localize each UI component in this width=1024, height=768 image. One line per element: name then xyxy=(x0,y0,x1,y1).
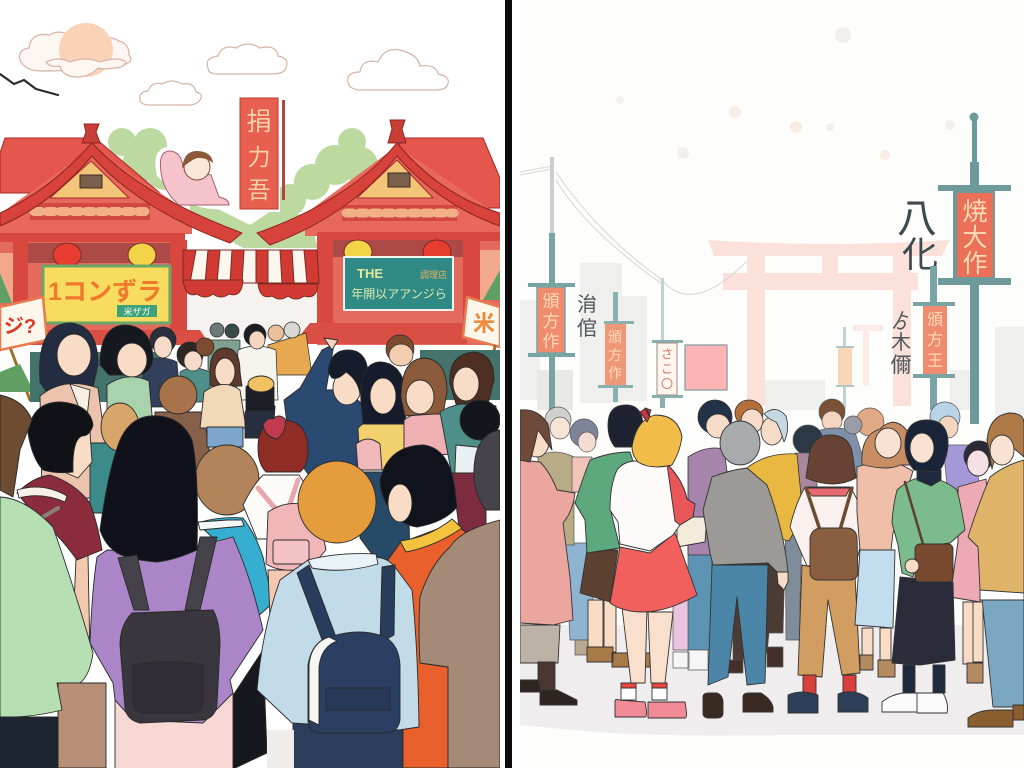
sun xyxy=(59,23,113,77)
small dark characters: ゟ xyxy=(891,310,911,333)
bird branch line xyxy=(0,74,58,95)
yellow shop sign: 1コンずラ xyxy=(48,278,162,306)
crowd person: dark outfit with yellow cap xyxy=(245,376,275,438)
yellow shop sign: 米ザガ xyxy=(123,306,151,317)
crowd person: woman in yellow top xyxy=(356,362,410,568)
cloud under the sun xyxy=(46,59,126,77)
cloud lower middle xyxy=(140,81,201,105)
crowd person: woman with black bob left xyxy=(40,323,106,498)
person: pink sweater girl xyxy=(855,422,914,677)
beam and pillars xyxy=(317,232,500,241)
pink reclining mascot xyxy=(155,147,232,209)
ground xyxy=(520,625,1024,736)
banner pole third: こ xyxy=(661,362,673,376)
green bushes xyxy=(108,128,378,248)
crowd person: black hair orange coat xyxy=(380,445,467,768)
banner pole far xyxy=(836,327,854,409)
banner pole right middle: 頒 xyxy=(927,311,943,329)
banner pole left: 頒 xyxy=(542,292,560,311)
banner pole left: 方 xyxy=(542,312,560,331)
crowd person: right front dark hair xyxy=(452,400,500,535)
person: right pink dress dark hair xyxy=(950,441,994,683)
roof finial xyxy=(388,120,406,143)
frieze xyxy=(30,203,150,220)
pink sign xyxy=(685,345,727,390)
teal wall behind crowd xyxy=(30,350,500,402)
person: green jacket dark hair xyxy=(575,405,650,667)
crowd person: tan pants and arm xyxy=(58,555,106,768)
person: yellow hair girl in red skirt xyxy=(610,408,707,718)
person: purple sweater xyxy=(688,400,732,555)
cloud right xyxy=(348,50,448,90)
banner pole tall: 焼 xyxy=(962,198,988,226)
white placard left xyxy=(0,297,47,400)
crowd person: pink backpack with polka bow xyxy=(243,416,326,625)
frieze xyxy=(342,205,457,221)
small dark characters xyxy=(890,310,912,377)
beam and pillars xyxy=(0,233,185,242)
banner pole left xyxy=(528,157,575,410)
gable xyxy=(50,161,129,198)
left temple building xyxy=(0,124,242,345)
striped awning xyxy=(183,250,319,299)
front gable panel xyxy=(6,157,192,234)
crowd person: orange hair navy backpack xyxy=(257,461,419,768)
cloud upper middle xyxy=(207,44,287,74)
soft floating dots xyxy=(616,27,955,160)
teal shop sign xyxy=(344,257,453,310)
crowd person: navy jacket man xyxy=(284,338,368,474)
person: right yellow jacket with jeans xyxy=(968,413,1024,727)
banner pole second: 作 xyxy=(608,365,622,381)
sky xyxy=(0,0,500,400)
white placard right xyxy=(462,296,500,350)
person: green sweater girl with shoulder bag xyxy=(882,420,965,713)
teal shop sign: 調理店 xyxy=(420,270,447,280)
banner pole second xyxy=(598,292,634,402)
right temple building xyxy=(257,120,500,345)
faded city buildings xyxy=(520,263,1024,417)
store opening xyxy=(188,283,317,338)
crowd person: grey-brown hair xyxy=(474,430,500,510)
small text beside left pole: 倌 xyxy=(577,317,597,340)
large dark characters: 八 xyxy=(897,197,937,241)
banner pole tall: 大 xyxy=(962,224,988,252)
person: grey jacket back view xyxy=(703,421,788,718)
teal shop sign: THE xyxy=(357,266,383,281)
flat upper roof xyxy=(0,138,160,193)
crowd person: woman with glasses in pink xyxy=(401,358,450,458)
teal shop sign: 年開以アアンジら xyxy=(351,287,447,301)
banner pole third xyxy=(652,278,683,408)
banner pole tall: 作 xyxy=(962,250,988,278)
left shop canopy xyxy=(30,330,210,345)
faded torii gate xyxy=(708,240,950,406)
red hanging banner: 吾 xyxy=(248,177,270,203)
banner pole second: 頒 xyxy=(608,329,622,345)
crowd person: woman with cream sweater xyxy=(200,348,246,447)
utility wires xyxy=(520,166,746,294)
crowd person: right woman with brown hair xyxy=(440,352,496,476)
red hanging banner: 力 xyxy=(248,144,270,170)
ground gap shade xyxy=(267,730,294,768)
hanging lanterns xyxy=(53,240,451,267)
person: pink coat woman xyxy=(520,410,577,705)
crowd person: black hair maroon shirt xyxy=(17,402,102,560)
banner pole right middle: 方 xyxy=(927,331,943,349)
person: white hair man in yellow sweater xyxy=(747,409,803,541)
front gable panel xyxy=(305,152,490,236)
banner pole left: 作 xyxy=(542,332,560,351)
banner pole third: 〇 xyxy=(661,377,673,391)
small dark characters: 儞 xyxy=(890,354,912,377)
large dark characters: 化 xyxy=(902,234,938,275)
banner pole right middle: 王 xyxy=(927,353,943,370)
far background crowd xyxy=(143,322,414,407)
divider bar xyxy=(505,0,512,768)
white placard right: 米 xyxy=(473,311,495,336)
small text beside left pole: 㳙 xyxy=(577,293,597,316)
large dark characters xyxy=(897,197,938,275)
wall xyxy=(317,241,500,345)
roof finial xyxy=(82,124,100,143)
crowd person: green top with round hat xyxy=(90,325,157,513)
panel: festival scene xyxy=(0,0,500,768)
crowd person: back view brown short hair xyxy=(153,376,213,472)
wall xyxy=(0,242,170,345)
right shop canopy xyxy=(293,323,467,344)
person: brown hair girl with backpack xyxy=(788,435,868,713)
gable xyxy=(357,160,433,198)
crowd person: tan coat xyxy=(419,520,500,768)
background crowd row xyxy=(538,399,981,673)
panel: street scene xyxy=(520,0,1024,768)
white placard left: ジ? xyxy=(4,316,36,338)
small dark characters: 木 xyxy=(891,331,911,354)
banner pole third: さ xyxy=(661,347,673,361)
crowd person: left brown hair green jacket xyxy=(0,395,93,768)
gable barge board xyxy=(0,143,242,243)
banner pole tall xyxy=(938,112,1011,424)
yellow shop sign xyxy=(43,266,170,323)
person: ginger man xyxy=(735,400,763,433)
flat upper roof xyxy=(398,138,500,208)
gable barge board xyxy=(257,143,500,245)
banner pole second: 方 xyxy=(608,347,622,363)
red hanging banner xyxy=(238,96,285,212)
small text beside left pole xyxy=(577,293,597,340)
cloud behind the sun xyxy=(19,32,131,71)
crowd person: brown hair blue shirt xyxy=(195,445,273,617)
red hanging banner: 捐 xyxy=(246,108,272,136)
pale backdrop xyxy=(520,0,1024,768)
banner pole right middle xyxy=(913,266,955,410)
side shrubs xyxy=(0,270,500,392)
crowd person: long black hair purple sweater with backpack xyxy=(90,416,267,768)
